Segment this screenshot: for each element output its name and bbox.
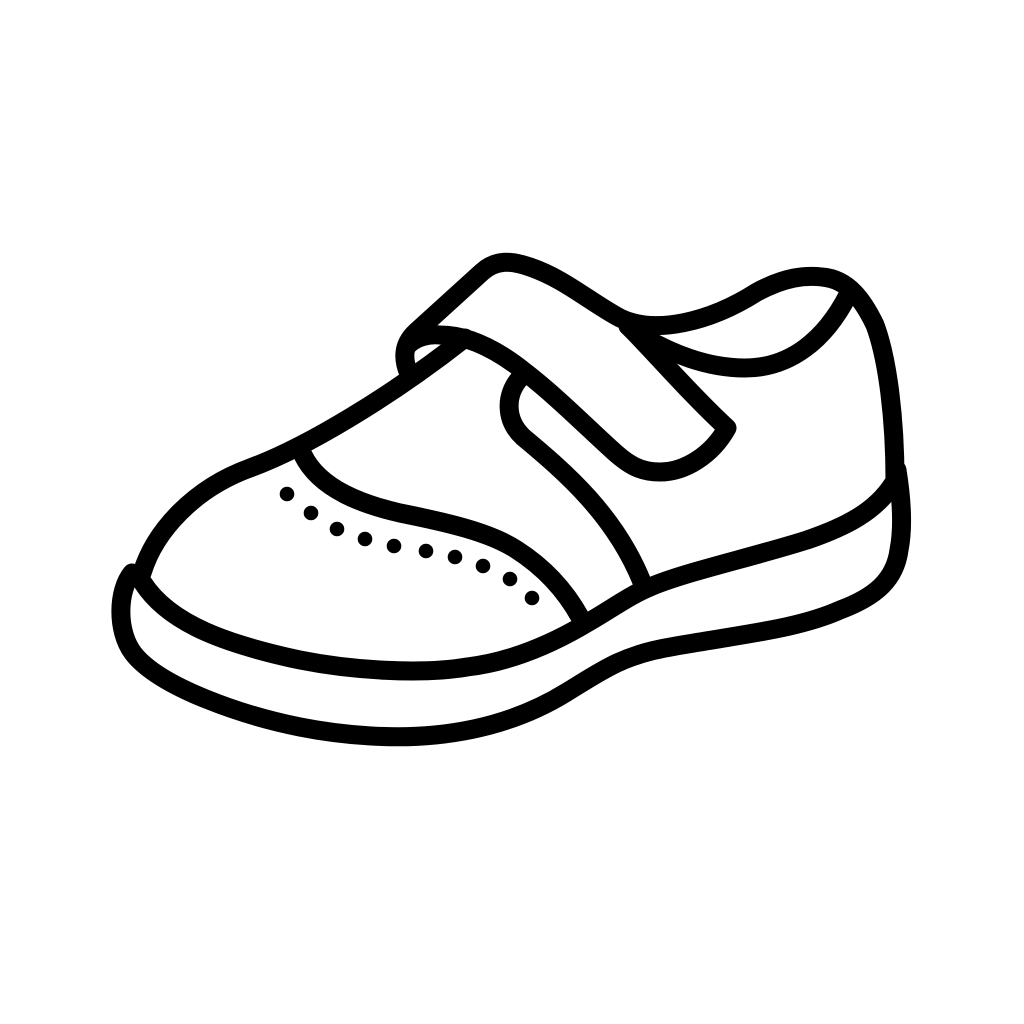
collar and heel outline with strap top edge [405, 262, 895, 480]
sole top line [143, 484, 893, 671]
collar inner lining [645, 295, 848, 368]
side panel seam [509, 378, 642, 582]
toe cap seam [303, 455, 580, 617]
sole bottom line [121, 470, 902, 737]
strap [408, 326, 727, 472]
perforation dots [280, 487, 539, 605]
toe and vamp top line [142, 338, 465, 573]
